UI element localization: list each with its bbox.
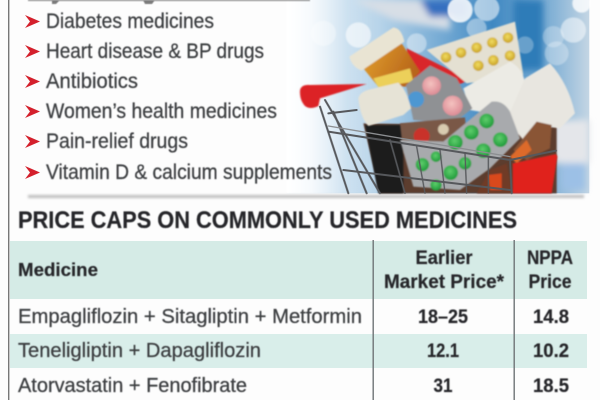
bullet list bbox=[25, 10, 332, 184]
pink and blue blister bbox=[406, 66, 472, 123]
bullet: diabetes: Diabetes medicines bbox=[46, 10, 214, 33]
section heading: PRICE CAPS ON COMMONLY USED MEDICINES bbox=[18, 207, 517, 234]
header: NPPA price: NPPA bbox=[527, 248, 573, 269]
bullet: women's health: Women’s health medicines bbox=[46, 100, 277, 123]
red cart handle bbox=[300, 84, 367, 108]
orange-brown contents right bbox=[513, 122, 552, 160]
white capsules bbox=[463, 62, 525, 133]
white fade at left of photo bbox=[287, 0, 589, 193]
row: teneligliptin: 10.2 bbox=[533, 340, 569, 362]
left panel border bbox=[8, 0, 9, 400]
shaded row band bbox=[10, 334, 587, 368]
row: teneligliptin bbox=[18, 340, 569, 362]
column divider: NPPA price bbox=[514, 240, 515, 400]
header: earlier market price: Market Price* bbox=[384, 272, 505, 293]
header: NPPA price bbox=[527, 248, 573, 293]
bullet: vitamin D: Vitamin D & calcium supplements bbox=[46, 161, 332, 184]
clipped heading descenders at top edge bbox=[28, 0, 310, 4]
row: empagliflozin: 14.8 bbox=[533, 306, 569, 328]
photo backdrop bbox=[287, 0, 589, 193]
header: earlier market price: Earlier bbox=[416, 248, 473, 269]
red box behind bbox=[407, 48, 470, 93]
row: empagliflozin bbox=[18, 306, 569, 328]
row: atorvastatin: 31 bbox=[434, 375, 453, 397]
row: empagliflozin: Empagliflozin + Sitagliptin + Metformin bbox=[18, 306, 362, 328]
photo: shopping cart full of medicines bbox=[287, 0, 591, 193]
column divider: earlier price bbox=[372, 240, 374, 400]
table header band bbox=[10, 241, 587, 299]
bullet: antibiotics: Antibiotics bbox=[46, 70, 138, 93]
row: teneligliptin: 12.1 bbox=[427, 340, 459, 362]
row: atorvastatin: Atorvastatin + Fenofibrate bbox=[18, 375, 247, 397]
yellow pill blister bbox=[427, 22, 523, 83]
orange pill bottle bbox=[363, 43, 420, 87]
row: atorvastatin: 18.5 bbox=[533, 375, 569, 397]
brown box bbox=[400, 117, 467, 157]
shadow beneath list panel bbox=[28, 195, 584, 198]
price table bbox=[10, 240, 587, 400]
green blister bbox=[400, 101, 520, 190]
bullet: pain relief: Pain-relief drugs bbox=[46, 130, 188, 153]
red cart side panel bbox=[513, 154, 557, 193]
white bottle cap bbox=[358, 83, 411, 126]
bokeh lights bbox=[311, 0, 591, 65]
row: empagliflozin: 18–25 bbox=[418, 306, 468, 328]
row: atorvastatin bbox=[18, 375, 569, 397]
header: NPPA price: Price bbox=[528, 272, 572, 293]
row: teneligliptin: Teneligliptin + Dapagliflozin bbox=[18, 340, 261, 362]
cart basket interior bbox=[363, 123, 557, 193]
cart wire frame bbox=[320, 100, 556, 193]
bullet: heart: Heart disease & BP drugs bbox=[46, 40, 264, 63]
header: earlier market price bbox=[384, 248, 505, 293]
header: medicine: Medicine bbox=[18, 259, 98, 280]
